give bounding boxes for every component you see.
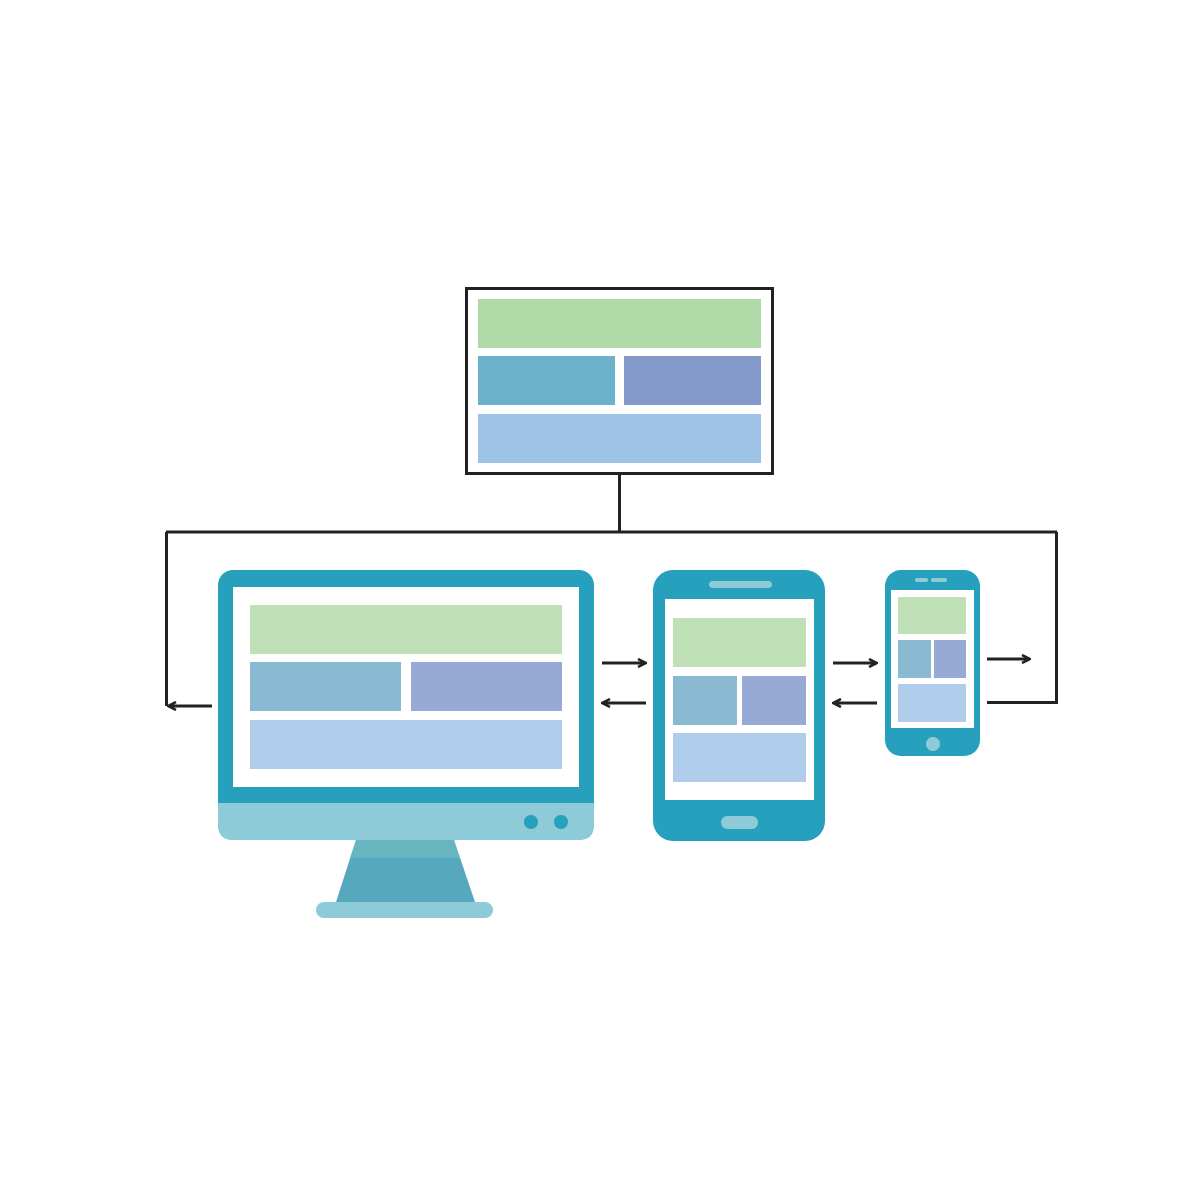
arrows between monitor and tablet bbox=[602, 663, 646, 703]
wireframe layout box bbox=[466, 288, 772, 474]
arrow and line to right edge bbox=[987, 659, 1057, 702]
arrow: to left edge bbox=[168, 704, 212, 708]
monitor bbox=[218, 570, 594, 918]
phone bbox=[885, 570, 980, 756]
tablet bbox=[653, 570, 825, 841]
arrows between tablet and phone bbox=[833, 663, 877, 703]
connector lines bbox=[166, 473, 1057, 706]
